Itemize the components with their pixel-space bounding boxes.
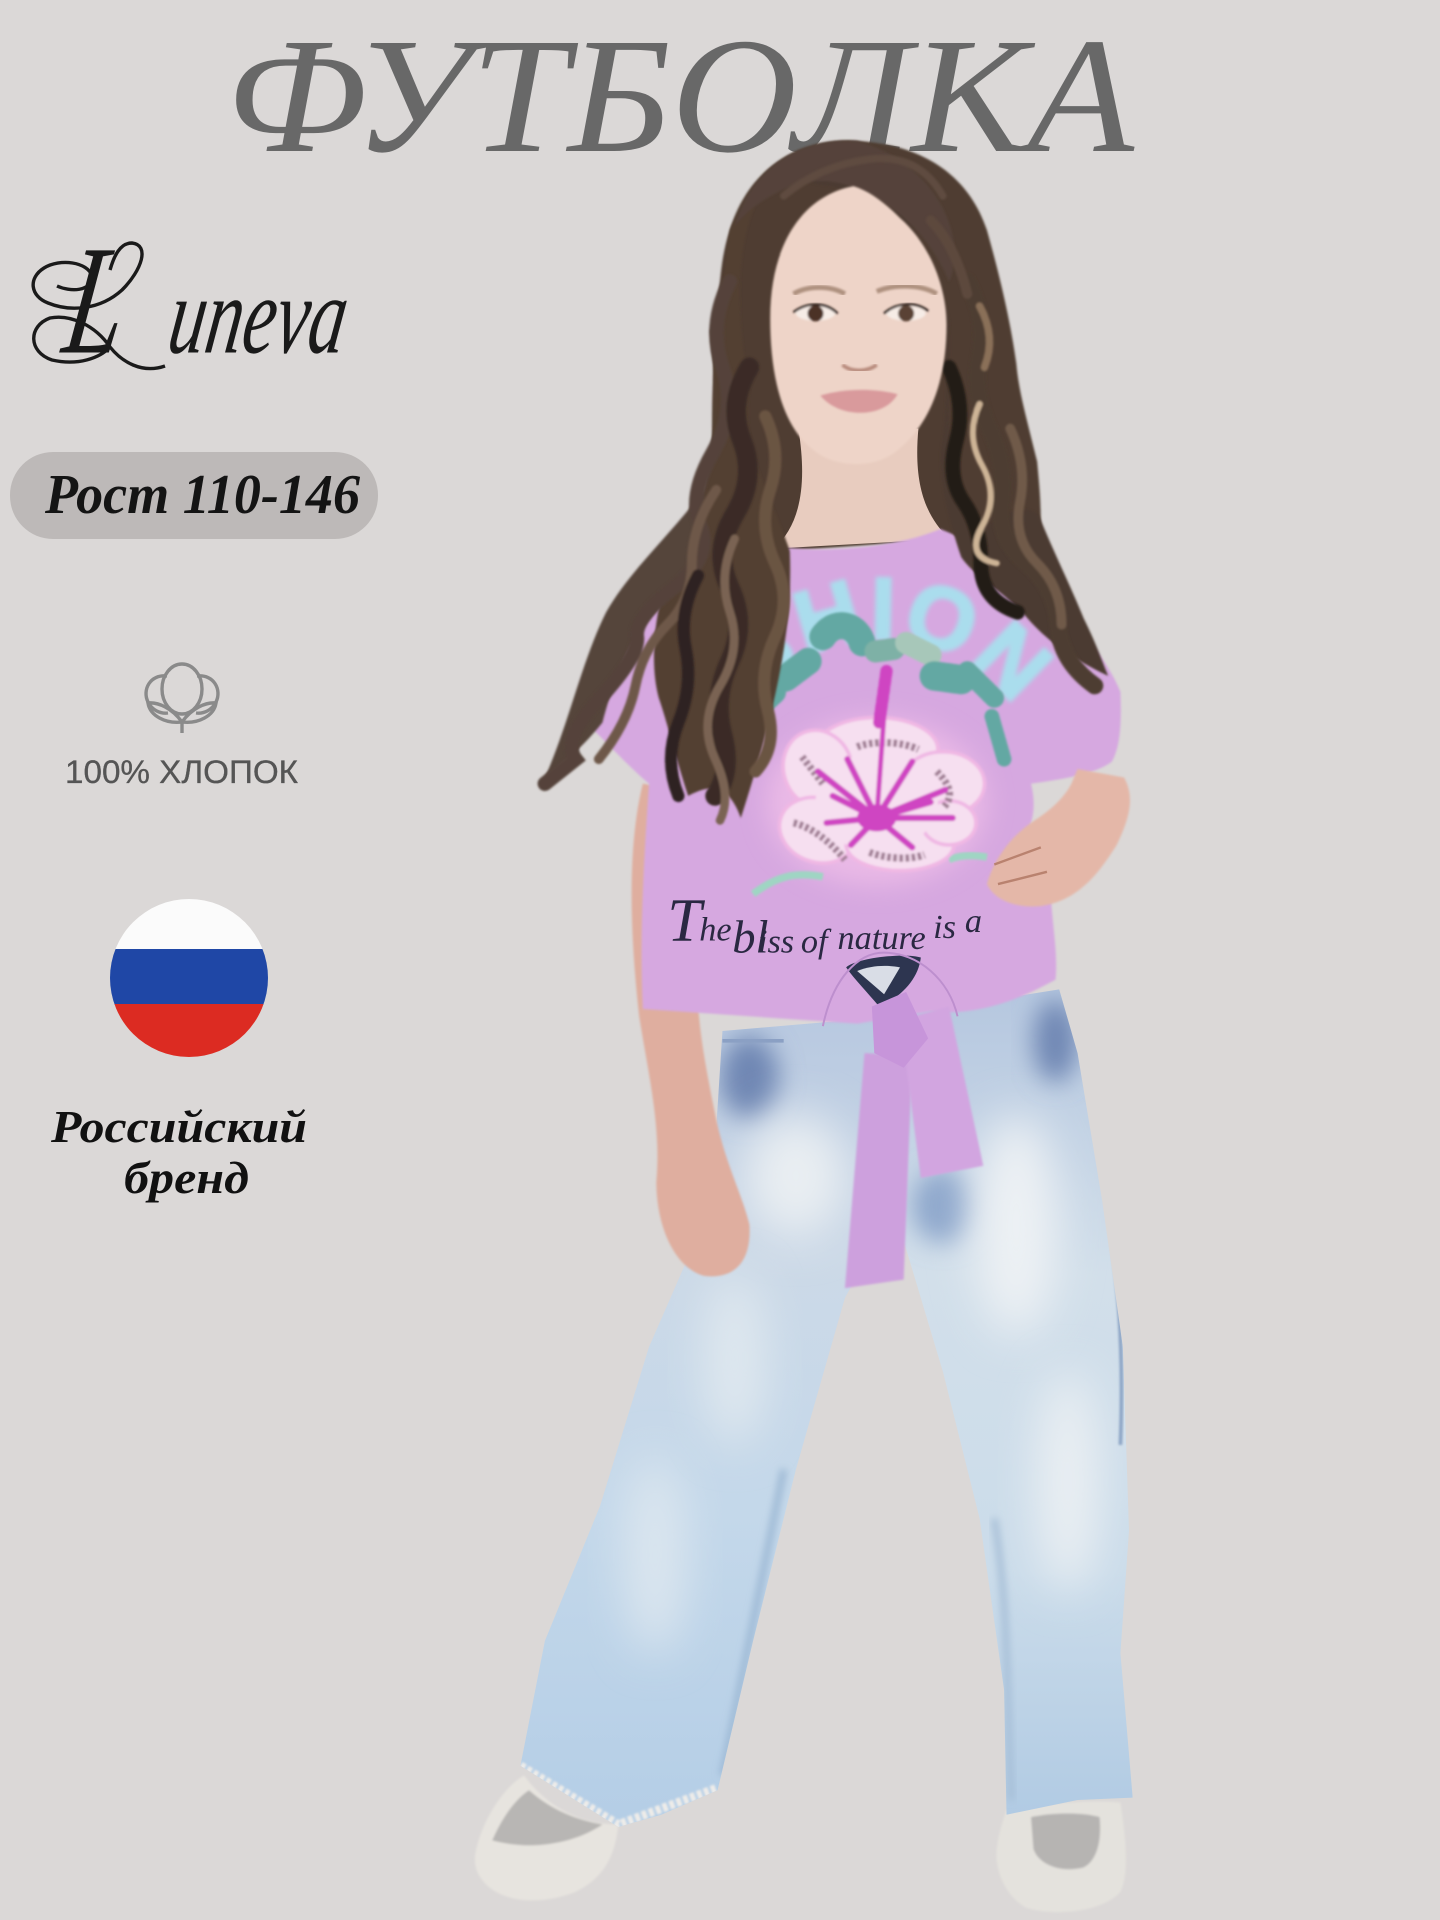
- bow knot: [872, 992, 928, 1068]
- left jeans leg: [520, 1020, 876, 1827]
- cotton icon: [146, 664, 218, 733]
- hair front solid: [545, 141, 1108, 818]
- finger lines: [994, 847, 1047, 884]
- shirt slogan script: of: [801, 923, 832, 961]
- height pill: Рост 110-146: [44, 464, 360, 526]
- title: ФУТБОЛКА: [226, 4, 1135, 187]
- height pill: [10, 452, 378, 539]
- shirt tie cut-out: [846, 956, 921, 1007]
- russian brand caption: Российский: [50, 1101, 307, 1152]
- shirt slogan script: iss: [758, 923, 794, 961]
- shirt print: sequins: [710, 626, 1004, 778]
- shirt slogan script: T: [667, 886, 705, 954]
- brand logo: uneva: [162, 253, 357, 377]
- white jeans glimpse: [857, 966, 900, 994]
- mouth: [820, 390, 898, 413]
- right arm and hand: [987, 769, 1130, 907]
- right jeans leg: [905, 990, 1132, 1815]
- left shoe: [475, 1776, 618, 1900]
- shirt slogan script: a: [965, 902, 982, 940]
- cotton label: 100% ХЛОПОК: [65, 754, 298, 790]
- tie seam: [823, 953, 958, 1026]
- nose: [842, 365, 877, 370]
- eyes: [793, 304, 928, 321]
- russian brand caption: [50, 1101, 307, 1203]
- girl figure: [476, 138, 1132, 1911]
- shirt slogan script: nature: [838, 919, 926, 957]
- shirt print: pink glow: [767, 719, 987, 885]
- brand logo: [33, 214, 362, 386]
- russian brand caption: бренд: [124, 1152, 249, 1203]
- eyebrows: [793, 286, 937, 294]
- bow tail short: [906, 1007, 983, 1178]
- shirt slogan script: bl: [732, 913, 768, 964]
- shirt print: leaves: [753, 856, 987, 894]
- face: [770, 186, 947, 464]
- flag of Russia: [110, 899, 268, 1057]
- neck: [774, 429, 949, 549]
- shirt slogan script: he: [699, 910, 732, 948]
- t-shirt: [585, 529, 1121, 1024]
- brand logo: L: [54, 214, 139, 386]
- hair back: [703, 141, 1041, 551]
- right shoe: [996, 1802, 1126, 1912]
- shirt slogan script: is: [933, 908, 956, 946]
- left arm: [632, 784, 750, 1276]
- bow tail long: [845, 1053, 912, 1288]
- shirt print: slogan arc: ASHION: [780, 575, 1056, 704]
- shirt print: flower: [770, 671, 984, 874]
- hair strands: [545, 158, 1095, 820]
